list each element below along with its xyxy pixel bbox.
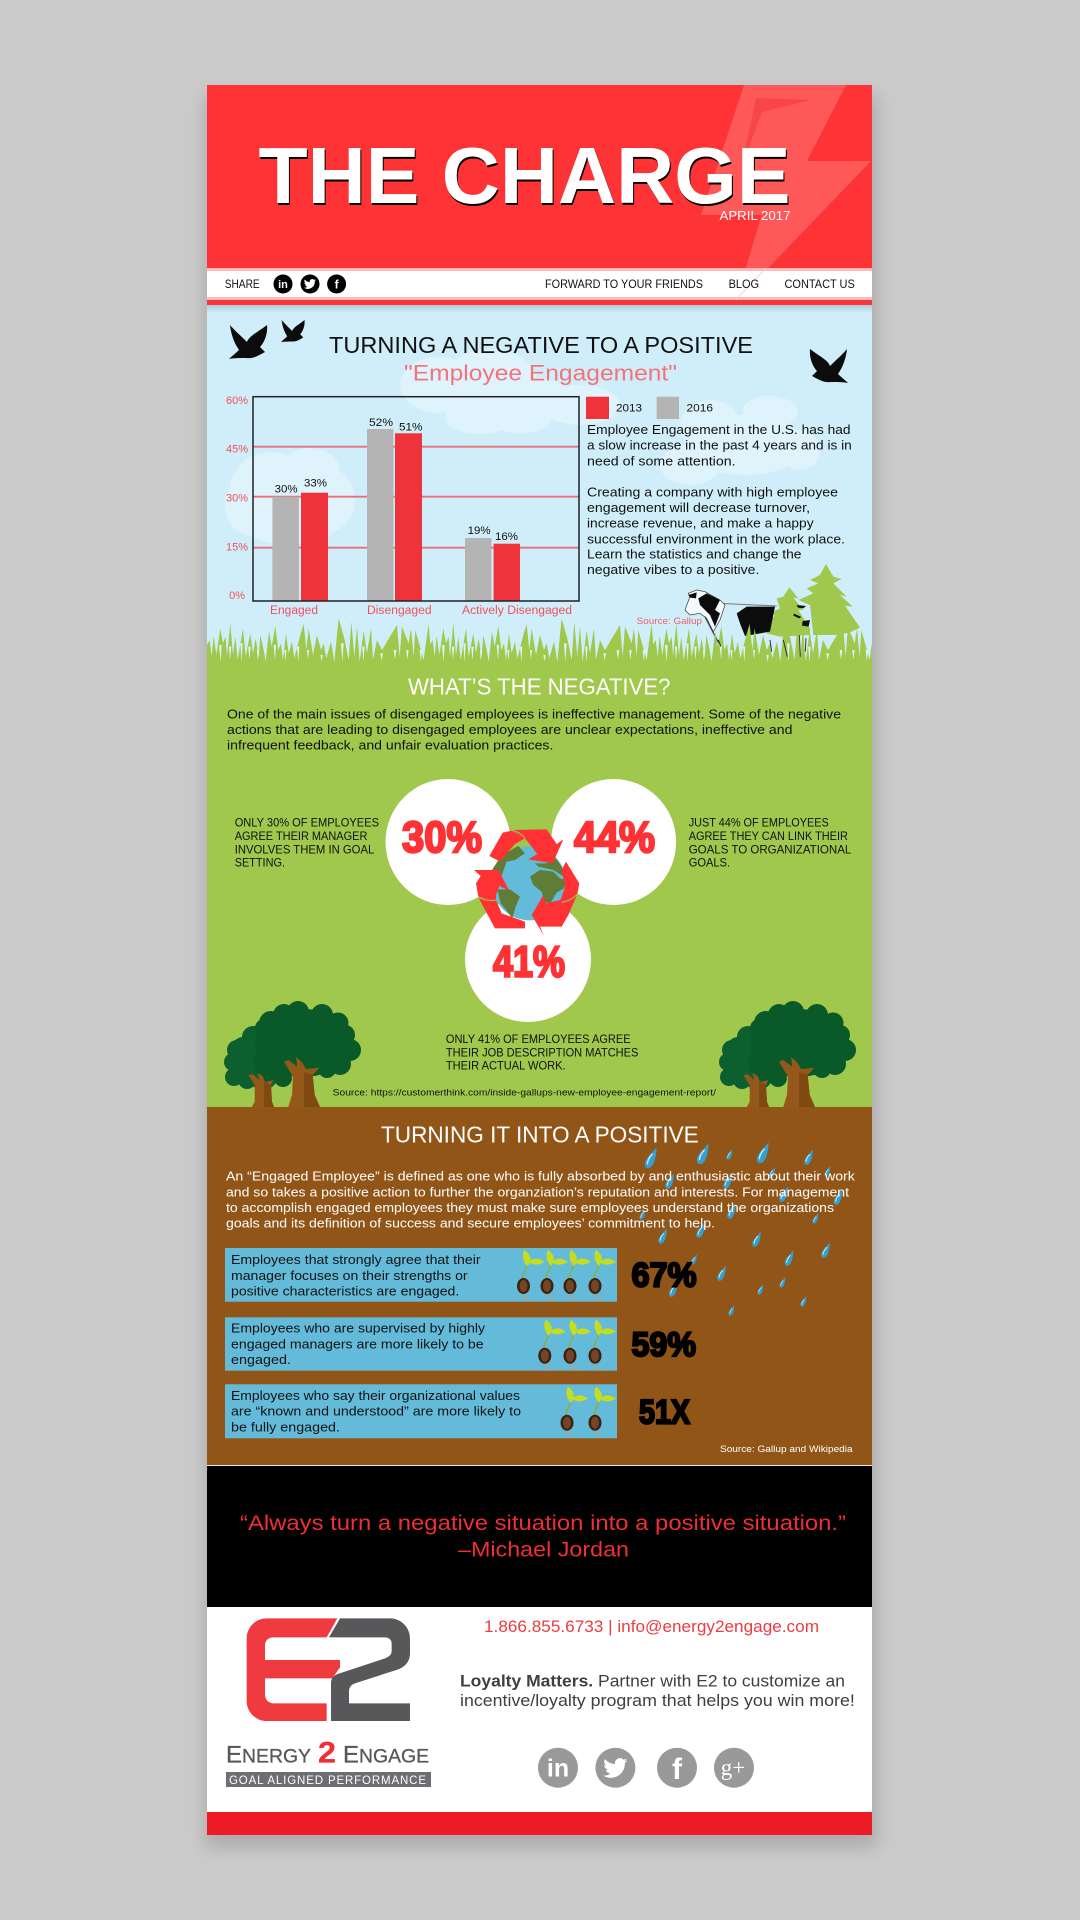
logo: company name: NGAGE [359,1746,429,1768]
logo: company name [226,1737,429,1770]
body text [227,706,841,752]
nav link: blog: BLOG [729,277,759,291]
logo: tagline: GOAL ALIGNED PERFORMANCE [229,1775,426,1787]
value labels: 52% [369,417,393,429]
icon: bird right [810,349,848,383]
icon: cow [685,590,810,646]
heading: WHAT’S THE NEGATIVE? [408,673,670,699]
bars: disengaged [367,429,422,601]
newsletter drop shadow [205,95,877,1847]
body text: infrequent feedback, and unfair evaluation practices. [227,737,553,752]
stat row: 59%: engaged. [231,1352,291,1367]
source: gallup and wikipedia: Source: Gallup and Wikipedia [720,1444,853,1455]
value labels: 30% [275,484,298,496]
stat row: 67%: positive characteristics are engaged. [231,1283,459,1298]
clouds [225,349,820,545]
cow legs over grass [718,635,806,657]
stat circle: 30% [386,779,510,905]
category labels: Disengaged [367,605,432,617]
quote text: “Always turn a negative situation into a positive situation.” [240,1512,846,1535]
value labels: 33% [304,478,327,490]
category labels: Actively Disengaged [462,605,572,617]
stat circle: 44% [551,779,676,905]
contact details: 1.866.855.6733 | info@energy2engage.com [484,1617,819,1636]
panel: turning it into a positive [207,1107,872,1465]
value labels: 16% [495,531,518,543]
panel: header banner [207,85,872,302]
grass [207,618,876,670]
logo: company name: E [226,1742,242,1769]
stat text: 41%: ONLY 41% OF EMPLOYEES AGREE [446,1033,631,1046]
stat row: 59% [225,1317,696,1371]
stat row: 59%: engaged managers are more likely to be [231,1336,484,1351]
pine trees [767,564,860,637]
footer bar [207,1812,872,1835]
icon: linkedin: in [278,279,288,291]
logo: company name: NERGY [242,1746,311,1768]
icon: google plus grey: g+ [721,1755,745,1780]
body text: One of the main issues of disengaged employees is ineffective management. Some of the negative [227,706,841,721]
y axis labels: 45% [226,444,248,456]
stat row: 59%: Employees who are supervised by highly [231,1321,486,1336]
stat circle: 41%: 41% [493,938,565,987]
icon: linkedin grey [538,1748,578,1788]
bars: engaged [272,493,328,601]
stat text: 44%: AGREE THEY CAN LINK THEIR [689,830,848,843]
stat row: 67%: Employees that strongly agree that their [231,1252,481,1267]
icon: recycling globe [474,829,579,936]
stat text: 44% [689,817,852,870]
stat text: 41%: THEIR JOB DESCRIPTION MATCHES [446,1046,639,1059]
y axis labels: 15% [226,542,248,554]
logo: company name: 2 [318,1737,336,1770]
panel: footer [207,1607,872,1812]
stat row: 51X: Employees who say their organizational values [231,1388,521,1403]
icon: trees right [719,1001,856,1108]
intro text: need of some attention. [587,453,736,468]
panel: sky section with engagement chart [207,305,876,670]
bar chart [226,395,579,617]
stat text: 41%: THEIR ACTUAL WORK. [446,1060,566,1073]
y axis labels: 60% [226,395,248,407]
issue date: APRIL 2017 [720,208,790,223]
value labels: 19% [468,525,491,537]
icon: linkedin [274,274,292,294]
source link: Source: https://customerthink.com/inside-gallups-new-employee-engagement-report/ [333,1088,716,1099]
chart legend [586,397,713,419]
stat row: 67%: 67% [632,1257,696,1295]
source: gallup: Source: Gallup [637,616,702,627]
chart legend: 2016 [686,403,713,415]
panel: what's the negative [207,668,872,1108]
intro text: Employee Engagement in the U.S. has had [587,422,850,437]
y axis labels [226,395,248,602]
icon: facebook: f [335,278,340,292]
raindrops [639,1142,842,1316]
body text: An “Engaged Employee” is defined as one who is fully absorbed by and enthusiastic about their work [226,1169,855,1184]
body text: to accomplish engaged employees they must make sure employees understand the organizations [226,1200,835,1215]
body text: and so takes a positive action to further the organziation’s reputation and interests. For management [226,1185,849,1200]
loyalty text [460,1672,855,1710]
intro text: increase revenue, and make a happy [587,515,814,530]
logo: company name: E [343,1742,359,1769]
y axis labels: 0% [229,590,245,602]
stat text: 30%: INVOLVES THEM IN GOAL [235,843,375,856]
heading: TURNING IT INTO A POSITIVE [381,1122,699,1148]
stat row: 51X: be fully engaged. [231,1419,340,1434]
grid lines [253,447,579,548]
intro text: Creating a company with high employee [587,485,838,500]
subheading: "Employee Engagement" [404,361,677,386]
stat row: 59%: 59% [632,1326,696,1364]
intro text: Learn the statistics and change the [587,547,802,562]
panel: navigation bar [207,268,872,305]
icon: linkedin grey: in [547,1754,569,1782]
icon: facebook grey [657,1748,697,1788]
icon: twitter grey [595,1748,635,1788]
logo: E2 mark [247,1618,410,1721]
stat text: 44%: GOALS. [689,857,730,870]
stat row: 67%: manager focuses on their strengths or [231,1268,468,1283]
category labels [270,605,572,617]
title: THE CHARGE [258,131,790,220]
stat row: 51X: are “known and understood” are more likely to [231,1404,521,1419]
stat text: 44%: JUST 44% OF EMPLOYEES [689,817,829,830]
icon: facebook grey: f [672,1753,683,1786]
intro text: negative vibes to a positive. [587,562,759,577]
value labels [275,417,518,543]
chart frame [253,397,579,601]
lightning bolt [701,85,871,302]
nav link: contact: CONTACT US [784,277,855,291]
share label: SHARE [225,277,260,291]
bars: actively disengaged [465,538,520,601]
stat text: 30% [235,817,379,870]
icon: twitter [300,274,320,294]
y axis labels: 30% [226,493,248,505]
loyalty text: Loyalty Matters. Partner with E2 to customize an [460,1672,845,1691]
category labels: Engaged [270,605,318,617]
quote attribution: –Michael Jordan [458,1539,629,1562]
stat row: 67% [225,1248,696,1302]
intro text [587,422,852,577]
stat circle: 44%: 44% [574,813,655,862]
stat text: 41% [446,1033,639,1073]
icon: facebook [327,274,346,294]
stat circle: 30%: 30% [402,813,482,862]
icon: bird small [281,320,305,342]
nav link: forward: FORWARD TO YOUR FRIENDS [545,277,703,291]
stat text: 44%: GOALS TO ORGANIZATIONAL [689,843,852,856]
icon: google plus grey [714,1748,754,1788]
body text: goals and its definition of success and secure employees’ commitment to help. [226,1215,715,1230]
stat circle: 41% [465,897,591,1022]
body text: actions that are leading to disengaged employees are unclear expectations, ineffective and [227,722,792,737]
stat row: 51X [225,1384,690,1438]
icon: bird left [229,325,267,359]
intro text: a slow increase in the past 4 years and is in [587,437,852,452]
intro text: engagement will decrease turnover, [587,500,810,515]
value labels: 51% [399,422,423,434]
stat text: 30%: AGREE THEIR MANAGER [235,830,367,843]
loyalty text: incentive/loyalty program that helps you win more! [460,1691,855,1710]
body text [226,1169,855,1230]
chart legend: 2013 [616,403,642,415]
icon: trees left [224,1001,361,1108]
stat row: 51X: 51X [639,1393,690,1431]
panel: quote [207,1465,872,1607]
stat text: 30%: ONLY 30% OF EMPLOYEES [235,817,379,830]
stat text: 30%: SETTING. [235,857,285,870]
heading: TURNING A NEGATIVE TO A POSITIVE [329,332,753,358]
intro text: successful environment in the work place. [587,531,845,546]
